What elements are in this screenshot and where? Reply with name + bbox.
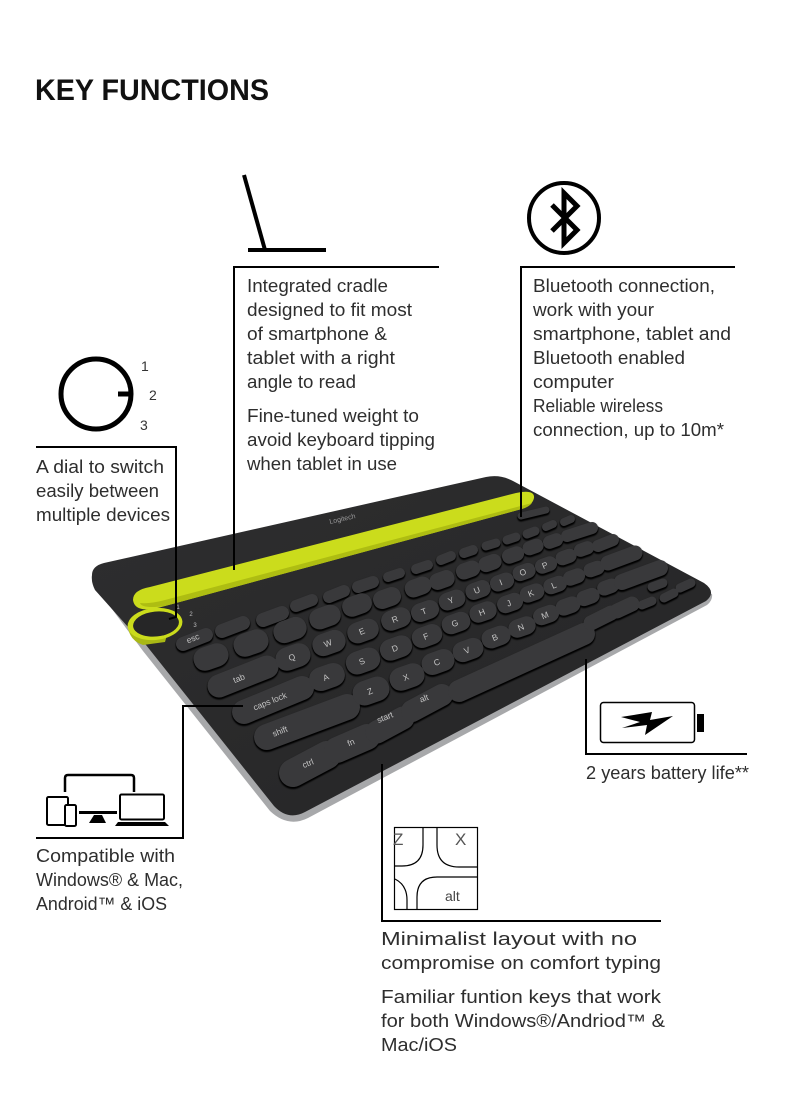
text: dial: A dial to switch (36, 457, 164, 477)
text: cradle: Integrated cradle (247, 276, 388, 296)
icon: dial: 1 (141, 358, 149, 374)
text: cradle: of smartphone & (247, 324, 387, 344)
key labels: A (321, 671, 331, 683)
home key row (244, 553, 635, 712)
icon: battery (600, 702, 704, 742)
icon: key layout: X (455, 830, 466, 849)
text: bluetooth: work with your (532, 300, 654, 320)
dial numbers (176, 605, 197, 629)
icon: key layout: alt (445, 888, 460, 904)
text: layout: Familiar funtion keys that work (381, 987, 662, 1007)
function key row: esc (185, 631, 202, 645)
key labels: T (420, 606, 428, 617)
text: cradle: avoid keyboard tipping (247, 430, 435, 450)
key labels: V (462, 644, 472, 656)
key labels: L (550, 580, 558, 591)
logitech logo: Logitech (329, 513, 356, 526)
icon: bluetooth (529, 183, 599, 253)
key labels: N (516, 621, 526, 633)
callout line: layout (382, 764, 661, 921)
text: compatibility: Compatible with (36, 846, 175, 866)
key labels: start (375, 709, 395, 725)
text: layout: compromise on comfort typing (381, 953, 661, 973)
key labels: ctrl (301, 756, 315, 770)
key labels: J (505, 598, 513, 609)
icon: dial (61, 358, 157, 433)
text: battery: 2 years battery life** (586, 763, 749, 783)
key labels: caps lock (252, 690, 289, 712)
text: layout: Minimalist layout with no (381, 929, 637, 949)
text: bluetooth: Reliable wireless (533, 396, 663, 416)
title: KEY FUNCTIONS (35, 74, 269, 107)
text: layout: for both Windows®/Andriod™ & (381, 1011, 665, 1031)
icon: dial: 3 (140, 417, 148, 433)
key labels: E (357, 625, 367, 637)
text: bluetooth: Bluetooth connection, (533, 276, 715, 296)
function key row (183, 519, 571, 645)
key labels: C (432, 656, 442, 668)
key labels: I (498, 577, 504, 587)
key labels: fn (346, 736, 356, 748)
yellow cradle slot (133, 492, 534, 609)
key labels: X (401, 671, 411, 683)
icon: key layout (393, 828, 478, 910)
keyboard illustration (92, 476, 712, 822)
key labels: W (322, 637, 333, 649)
dial numbers: 2 (189, 612, 193, 618)
device dial (126, 605, 184, 645)
dial numbers: 3 (193, 623, 197, 629)
shift key row (267, 568, 660, 737)
callout line: battery (586, 659, 747, 754)
key labels: D (390, 642, 400, 654)
key labels: Q (287, 651, 297, 663)
icon: key layout: Z (393, 830, 403, 849)
text: compatibility (36, 846, 183, 914)
text: cradle: designed to fit most (247, 300, 412, 320)
text: bluetooth: computer (533, 372, 614, 392)
bottom key row (293, 583, 691, 773)
cradle inner shade (140, 503, 532, 607)
icon: cradle stand (244, 175, 326, 250)
key labels: G (450, 617, 460, 629)
text: bluetooth: Bluetooth enabled (533, 348, 685, 368)
qwerty key row (219, 539, 613, 686)
key labels: Y (446, 594, 456, 606)
text: bluetooth: connection, up to 10m* (533, 420, 724, 440)
key labels: K (526, 587, 536, 599)
callout line: cradle (234, 267, 439, 570)
key labels: S (357, 655, 367, 667)
text: dial: multiple devices (36, 505, 170, 525)
number key row (190, 528, 592, 674)
key labels: B (490, 631, 500, 643)
text: compatibility: Windows® & Mac, (36, 870, 183, 890)
dial numbers: 1 (176, 605, 180, 611)
text: layout (381, 929, 665, 1055)
text: cradle (246, 276, 435, 474)
callout line: dial (36, 447, 176, 619)
key labels: alt (418, 692, 430, 705)
text: bluetooth (532, 276, 731, 440)
callout line: bluetooth (521, 267, 735, 517)
text: cradle: Fine-tuned weight to (247, 406, 419, 426)
text: bluetooth: smartphone, tablet and (533, 324, 731, 344)
text: cradle: angle to read (247, 372, 356, 392)
icon: dial: 2 (149, 387, 157, 403)
callout line: compatibility (36, 706, 243, 838)
key labels: M (540, 609, 550, 621)
text: layout: Mac/iOS (381, 1035, 457, 1055)
text: dial: easily between (36, 481, 159, 501)
key labels: P (540, 559, 550, 571)
text: compatibility: Android™ & iOS (36, 894, 167, 914)
icon: devices (47, 775, 169, 826)
text: cradle: tablet with a right (247, 348, 395, 368)
keyboard body (92, 476, 711, 815)
key labels: R (390, 613, 400, 625)
key labels: U (472, 584, 482, 596)
key labels (232, 559, 558, 770)
key labels: tab (232, 671, 246, 685)
key labels: O (518, 566, 528, 578)
bluetooth pairing key (521, 510, 546, 516)
key labels: F (422, 631, 430, 642)
key labels: H (477, 606, 487, 618)
keyboard grey underside (92, 500, 712, 822)
keys (183, 510, 691, 773)
key labels: shift (271, 723, 290, 739)
text: dial (36, 457, 170, 525)
key labels: Z (366, 686, 374, 697)
text: cradle: when tablet in use (246, 454, 397, 474)
